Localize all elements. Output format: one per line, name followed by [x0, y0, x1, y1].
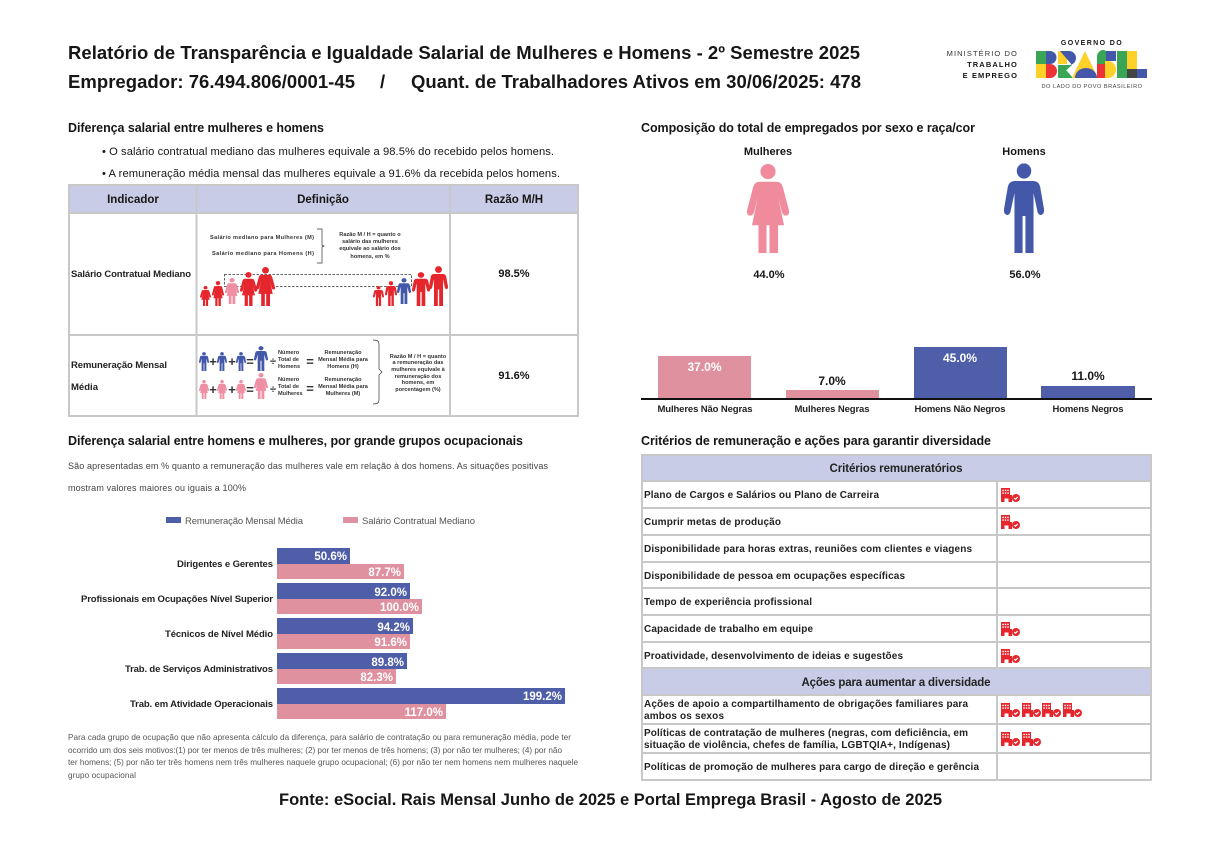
diagram: remuneração média: homens, em: [402, 380, 434, 386]
diagram: remuneração média: =: [246, 354, 254, 369]
legend: Remuneração Mensal Média: [185, 516, 304, 527]
logo: Governo do Brasil: DO LADO DO POVO BRASILEIRO: [1042, 84, 1143, 90]
bar chart: raça/cor: 7.0%: [818, 374, 846, 388]
logo: Governo do Brasil: GOVERNO DO: [1061, 40, 1123, 47]
row: trabalho em equipe: Capacidade de trabalho em equipe: [644, 624, 813, 635]
bar chart: grupos ocupacionais: 91.6%: [374, 637, 407, 649]
text block: explicação: [68, 461, 548, 493]
row: contratação de mulheres: situação de violência, chefes de família, LGBTQIA+, Indígenas): [644, 740, 950, 751]
bar chart: grupos ocupacionais: Dirigentes e Gerentes: [177, 559, 273, 570]
heading: composição: Composição do total de empregados por sexo e raça/cor: [641, 121, 975, 135]
diagram: remuneração média: Número: [278, 350, 300, 356]
text block: explicação: mostram valores maiores ou iguais a 100%: [68, 483, 246, 493]
logo: Ministério do Trabalho e Emprego: TRABALHO: [967, 60, 1018, 69]
row: proatividade: [644, 649, 1020, 663]
row: plano de cargos: [644, 488, 1020, 502]
pictogram: mulheres: 44.0%: [753, 269, 785, 281]
bar chart: raça/cor: Homens Negros: [1052, 404, 1124, 415]
diagram: remuneração média: [199, 340, 447, 404]
pictogram: homens: 56.0%: [1009, 269, 1041, 281]
text block: bullets: • A remuneração média mensal das mulheres equivale a 91.6% da recebida pelos homens.: [102, 168, 560, 180]
row: compartilhamento de obrigações: Ações de apoio a compartilhamento de obrigações familiares para: [644, 699, 968, 710]
diagram: salário mediano: homens, em %: [350, 254, 390, 260]
bar chart: grupos ocupacionais: 94.2%: [377, 622, 410, 634]
table: critérios e ações: [641, 454, 1152, 781]
diagram: salário mediano: Salário mediano para Mulheres (M): [210, 235, 314, 241]
row: tempo de experiência: Tempo de experiência profissional: [644, 597, 812, 608]
bar chart: grupos ocupacionais: 89.8%: [371, 657, 404, 669]
bar chart: grupos ocupacionais: 87.7%: [368, 567, 401, 579]
row: proatividade: Proatividade, desenvolvimento de ideias e sugestões: [644, 651, 903, 662]
row: promoção de mulheres: Políticas de promoção de mulheres para cargo de direção e gerência: [644, 762, 979, 773]
bar chart: raça/cor: Mulheres Não Negras: [658, 404, 752, 415]
text block: bullets: [102, 146, 560, 180]
diagram: remuneração média: =: [306, 381, 314, 396]
text block: nota de rodapé: [68, 733, 578, 780]
diagram: remuneração média: Total de: [278, 384, 299, 390]
diagram: remuneração média: Mulheres: [278, 391, 303, 397]
row: horas extras: Disponibilidade para horas extras, reuniões com clientes e viagens: [644, 544, 972, 555]
row: compartilhamento de obrigações: [644, 699, 1082, 722]
bar chart: grupos ocupacionais: Técnicos de Nível Médio: [165, 629, 273, 640]
legend: Salário Contratual Mediano: [362, 516, 475, 527]
bar chart: grupos ocupacionais: 100.0%: [380, 602, 419, 614]
diagram: remuneração média: Mensal Média para: [318, 384, 369, 390]
value: 98.5%: 98.5%: [498, 268, 530, 280]
title: Empregador: 76.494.806/0001-45: [68, 71, 355, 92]
diagram: salário mediano: salário das mulheres: [342, 239, 398, 245]
table header: Definição: [297, 194, 349, 206]
pictogram: homens: Homens: [1002, 146, 1046, 158]
text block: nota de rodapé: grupo ocupacional: [68, 771, 136, 780]
value: 91.6%: 91.6%: [498, 370, 530, 382]
diagram: remuneração média: a remuneração das: [392, 360, 444, 366]
text block: nota de rodapé: ocorrido um dos seis motivos:(1) por ter menos de três mulheres; (2) por ter menos de três homens; (3) por não ter mulheres; (4) por não: [68, 746, 562, 755]
diagram: remuneração média: +: [209, 354, 217, 369]
diagram: remuneração média: Remuneração: [324, 350, 362, 356]
heading: grupos ocupacionais: Diferença salarial entre homens e mulheres, por grande grupos ocupacionais: [68, 434, 523, 448]
pictogram: mulheres: [744, 146, 792, 281]
diagram: remuneração média: Razão M / H = quanto: [390, 354, 447, 360]
bar chart: grupos ocupacionais: 199.2%: [523, 691, 562, 703]
diagram: salário mediano: Razão M / H = quanto o: [339, 232, 401, 238]
diagram: salário mediano: [200, 229, 448, 306]
text block: bullets: • O salário contratual mediano das mulheres equivale a 98.5% do recebido pelos homens.: [102, 146, 554, 158]
diagram: remuneração média: +: [228, 382, 236, 397]
row label: remuneração mensal média: [71, 360, 167, 393]
logo: Ministério do Trabalho e Emprego: [947, 49, 1018, 80]
bar chart: raça/cor: 37.0%: [687, 360, 722, 374]
row label: remuneração mensal média: Remuneração Mensal: [71, 360, 167, 371]
table header: Indicador: [107, 194, 159, 206]
bar chart: grupos ocupacionais: [81, 548, 565, 719]
diagram: remuneração média: Remuneração: [324, 377, 362, 383]
bar chart: grupos ocupacionais: Trab. em Atividade Operacionais: [130, 699, 273, 710]
row: trabalho em equipe: [644, 622, 1020, 636]
heading: critérios: Critérios de remuneração e ações para garantir diversidade: [641, 434, 991, 448]
panel: composição: [641, 121, 1152, 415]
bar chart: grupos ocupacionais: 82.3%: [360, 672, 393, 684]
diagram: remuneração média: Mulheres (M): [326, 391, 360, 397]
title: Relatório de Transparência e Igualdade Salarial de Mulheres e Homens - 2º Semestre 2025: [68, 42, 860, 63]
diagram: remuneração média: remuneração dos: [395, 374, 441, 380]
row: metas de produção: Cumprir metas de produção: [644, 517, 781, 528]
table header: Razão M/H: [485, 194, 543, 206]
table header: ações: Ações para aumentar a diversidade: [802, 677, 990, 689]
panel: diferença por grupos ocupacionais: [68, 434, 578, 780]
diagram: remuneração média: Homens (H): [327, 364, 359, 370]
bar chart: grupos ocupacionais: Profissionais em Ocupações Nível Superior: [81, 594, 273, 605]
footer: fonte: Fonte: eSocial. Rais Mensal Junho de 2025 e Portal Emprega Brasil - Agosto de 2025: [279, 791, 942, 809]
row: contratação de mulheres: [644, 728, 1041, 751]
bar chart: raça/cor: Mulheres Negras: [794, 404, 870, 415]
diagram: salário mediano: Salário mediano para Homens (H): [212, 251, 314, 257]
panel: diferença salarial: [68, 121, 579, 417]
text block: nota de rodapé: ter homens; (5) por não ter três homens nem três mulheres naquele grupo ocupacional; (6) por não ter nem homens nem mulheres naquele: [68, 758, 578, 767]
bar chart: raça/cor: 45.0%: [943, 351, 977, 365]
diagram: remuneração média: =: [246, 382, 254, 397]
diagram: remuneração média: mulheres equivale à: [391, 367, 446, 373]
diagram: remuneração média: Número: [278, 377, 300, 383]
diagram: remuneração média: ÷: [270, 356, 276, 368]
diagram: remuneração média: +: [228, 354, 236, 369]
row label: salário contratual mediano: Salário Contratual Mediano: [71, 269, 191, 280]
title: /: [380, 71, 385, 92]
bar chart: grupos ocupacionais: Trab. de Serviços Administrativos: [125, 664, 273, 675]
diagram: remuneração média: ÷: [270, 384, 276, 396]
title: [68, 42, 861, 92]
heading: diferença salarial: Diferença salarial entre mulheres e homens: [68, 121, 324, 135]
diagram: remuneração média: Homens: [278, 364, 300, 370]
logo: Ministério do Trabalho e Emprego: E EMPREGO: [963, 71, 1018, 80]
table: indicadores: [68, 184, 579, 417]
pictogram: mulheres: Mulheres: [744, 146, 792, 158]
bar chart: raça/cor: [641, 347, 1152, 415]
table header: [107, 194, 543, 206]
diagram: remuneração média: porcentagem (%): [395, 387, 441, 393]
row: metas de produção: [644, 515, 1020, 529]
row label: remuneração mensal média: Média: [71, 382, 99, 393]
title: Quant. de Trabalhadores Ativos em 30/06/2025: 478: [411, 71, 861, 92]
row: plano de cargos: Plano de Cargos e Salários ou Plano de Carreira: [644, 490, 879, 501]
table header: critérios remuneratórios: Critérios remuneratórios: [830, 463, 962, 475]
pictogram: homens: [1002, 146, 1046, 281]
diagram: remuneração média: Total de: [278, 357, 299, 363]
diagram: remuneração média: +: [209, 382, 217, 397]
bar chart: grupos ocupacionais: 50.6%: [314, 551, 347, 563]
text block: explicação: São apresentadas em % quanto a remuneração das mulheres vale em relação à dos homens. As situações positivas: [68, 461, 548, 471]
bar chart: raça/cor: Homens Não Negros: [914, 404, 1006, 415]
text block: nota de rodapé: Para cada grupo de ocupação que não apresenta cálculo da diferença, para salário de contratação ou para remuneração média, pode ter: [68, 733, 571, 742]
bar chart: grupos ocupacionais: 117.0%: [405, 707, 443, 719]
diagram: remuneração média: =: [306, 354, 314, 369]
bar chart: raça/cor: 11.0%: [1071, 369, 1105, 383]
bar chart: grupos ocupacionais: 92.0%: [374, 587, 407, 599]
legend: [166, 516, 475, 527]
diagram: remuneração média: Mensal Média para: [318, 357, 369, 363]
row: contratação de mulheres: Políticas de contratação de mulheres (negras, com deficiência, em: [644, 728, 968, 739]
logo: Governo do Brasil: [1036, 40, 1147, 90]
diagram: salário mediano: equivale ao salário dos: [339, 246, 401, 252]
panel: critérios de remuneração: [641, 434, 1152, 781]
row: ocupações específicas: Disponibilidade de pessoa em ocupações específicas: [644, 571, 905, 582]
logo: Ministério do Trabalho e Emprego: MINISTÉRIO DO: [947, 49, 1018, 58]
row: compartilhamento de obrigações: ambos os sexos: [644, 711, 724, 722]
